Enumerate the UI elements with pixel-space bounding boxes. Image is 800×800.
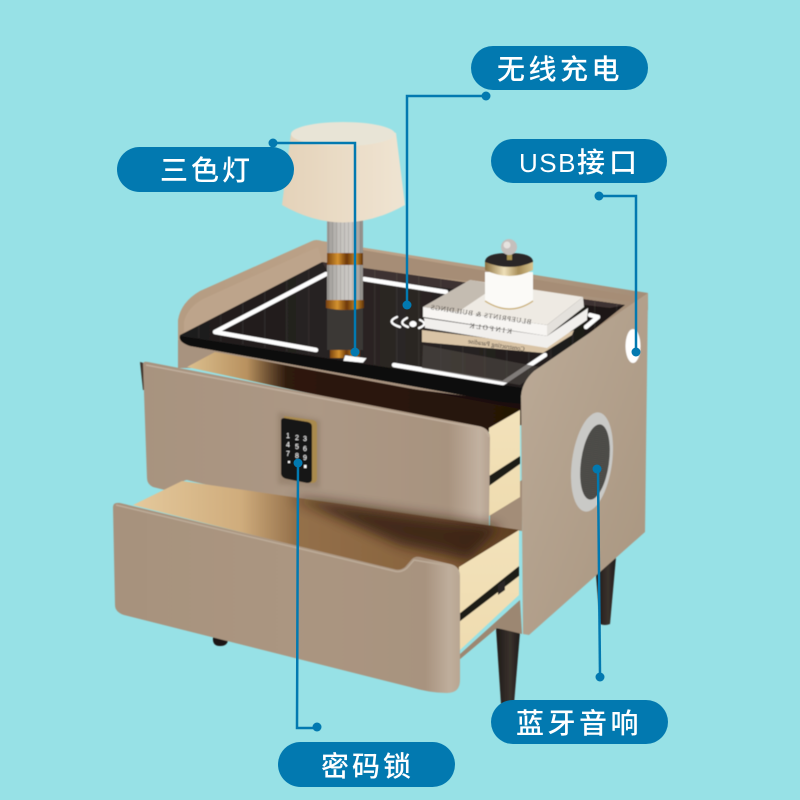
table lamp — [282, 122, 405, 310]
keypad lock: 3 — [303, 436, 307, 443]
icon: wireless charging symbol — [392, 317, 424, 328]
label: 密码锁: 密码锁 — [321, 751, 414, 782]
keypad lock: 6 — [303, 446, 307, 453]
bedside table — [113, 122, 648, 706]
gap between drawers — [490, 480, 522, 531]
cabinet interior below the glass — [178, 340, 525, 420]
cabinet rim — [178, 240, 648, 390]
label: 无线充电 — [471, 46, 648, 90]
callout line: USB port — [594, 192, 640, 356]
keypad lock: 4 — [286, 442, 290, 449]
USB port — [626, 329, 640, 363]
books and jar — [422, 239, 588, 353]
callout line: bluetooth speaker — [592, 464, 604, 682]
keypad lock: 5 — [295, 444, 299, 451]
lower drawer — [113, 481, 520, 693]
label: 蓝牙音响 — [491, 700, 668, 744]
label: 三色灯: 三色灯 — [160, 155, 253, 186]
books and jar: KINFOLK — [467, 321, 512, 336]
label: 蓝牙音响: 蓝牙音响 — [516, 708, 642, 739]
jar — [485, 272, 533, 308]
callout line: tri-colour lamp — [268, 138, 360, 356]
keypad lock: 1 — [286, 433, 290, 440]
label: 密码锁 — [278, 742, 455, 787]
keypad lock: 2 — [295, 435, 299, 442]
glass top — [180, 262, 625, 404]
label: USB接口 — [491, 139, 667, 183]
speaker — [565, 410, 619, 514]
label: 三色灯 — [117, 147, 294, 192]
callout line: wireless charging — [402, 92, 490, 310]
side panel — [521, 293, 648, 635]
label: 无线充电: 无线充电 — [497, 54, 623, 85]
bottom book — [422, 330, 574, 353]
middle book — [424, 308, 588, 348]
callout line: password lock — [294, 458, 322, 732]
books and jar: Constructing Paradise — [467, 338, 525, 353]
top book — [423, 280, 583, 325]
books and jar: BLUEPRINTS & BUILDINGS — [430, 303, 532, 326]
book reflection — [422, 345, 545, 385]
keypad lock — [278, 412, 320, 488]
keypad lock: 7 — [286, 451, 290, 458]
lamp reflection — [327, 308, 367, 363]
upper drawer — [140, 352, 520, 540]
keypad lock: 9 — [303, 455, 307, 462]
glowing light strips — [215, 274, 598, 383]
label: USB接口: USB接口 — [519, 147, 641, 178]
keypad lock: 8 — [295, 453, 299, 460]
rear and hidden legs — [213, 557, 616, 706]
